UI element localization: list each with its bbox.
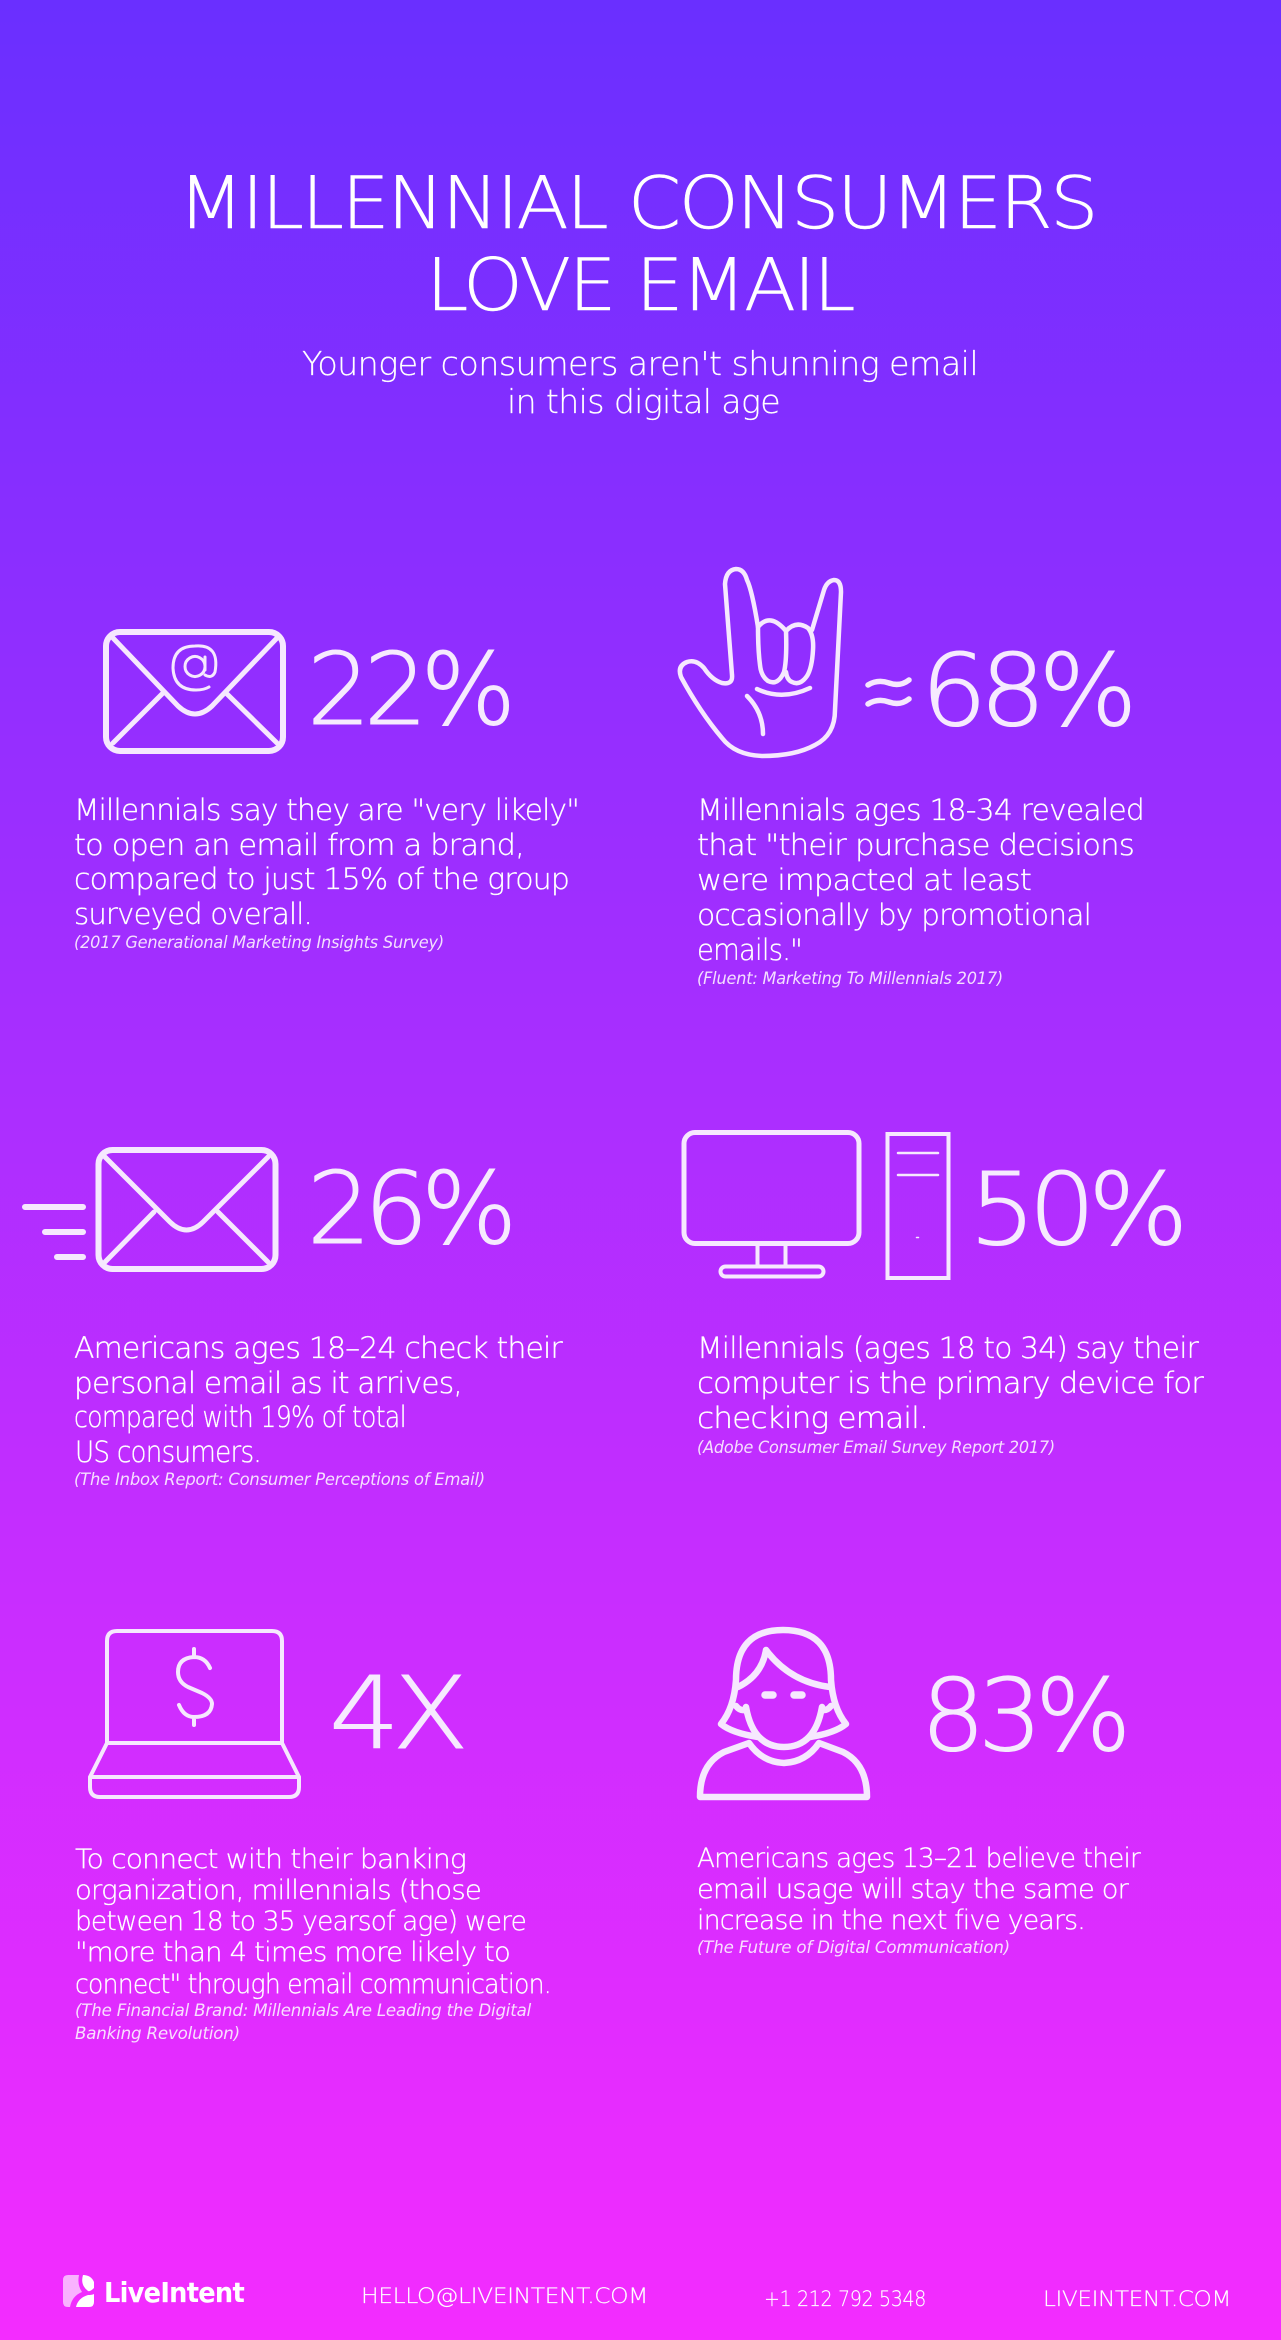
subtitle	[302, 344, 978, 421]
body text: emails."	[697, 933, 802, 967]
panel: 22 percent open rate	[74, 631, 579, 953]
subtitle: Younger consumers aren't shunning email	[302, 344, 978, 383]
stat: 22%: 22%	[307, 631, 509, 748]
title: MILLENNIAL CONSUMERS	[178, 161, 1096, 245]
body text: email usage will stay the same or	[697, 1874, 1130, 1905]
body text	[697, 1843, 1142, 1936]
icon: woman avatar	[700, 1630, 867, 1797]
body text: To connect with their banking	[75, 1844, 466, 1875]
citation	[75, 2001, 531, 2044]
icon: desktop computer	[684, 1132, 948, 1278]
body text: between 18 to 35 yearsof age) were	[75, 1906, 526, 1937]
body text: Millennials say they are "very likely"	[74, 793, 579, 827]
body text	[697, 793, 1144, 967]
citation: (Fluent: Marketing To Millennials 2017)	[697, 969, 1003, 989]
body text: surveyed overall.	[74, 897, 312, 931]
body text	[697, 1331, 1204, 1435]
title: LOVE EMAIL	[426, 243, 853, 327]
citation: (Adobe Consumer Email Survey Report 2017)	[697, 1438, 1055, 1458]
panel: 50 percent computer	[684, 1132, 1204, 1458]
panel: 26 percent check email	[25, 1150, 563, 1490]
body text	[74, 793, 579, 931]
contact: email: HELLO@LIVEINTENT.COM	[361, 2284, 648, 2308]
body text: that "their purchase decisions	[697, 828, 1134, 862]
citation: (2017 Generational Marketing Insights Survey)	[74, 933, 444, 953]
stat: 26%: 26%	[307, 1150, 510, 1267]
body text	[75, 1844, 551, 2000]
body text: US consumers.	[75, 1435, 261, 1469]
panel: 68 percent purchase decisions	[680, 569, 1144, 989]
contact: phone: +1 212 792 5348	[764, 2287, 926, 2311]
body text: were impacted at least	[697, 863, 1031, 897]
body text: occasionally by promotional	[697, 898, 1091, 932]
body text: connect" through email communication.	[75, 1969, 551, 2000]
icon: laptop with dollar sign	[90, 1631, 299, 1797]
body text: Americans ages 13–21 believe their	[697, 1843, 1142, 1874]
body text: Millennials ages 18-34 revealed	[697, 793, 1144, 827]
icon: hand sign	[680, 569, 841, 756]
citation: Banking Revolution)	[75, 2024, 240, 2044]
body text: checking email.	[697, 1401, 928, 1435]
body text: increase in the next five years.	[697, 1905, 1085, 1936]
icon: fast envelope	[25, 1150, 276, 1269]
logo: LiveIntent: LiveIntent	[104, 2276, 244, 2309]
stat: 50%: 50%	[969, 1151, 1181, 1268]
body text: compared to just 15% of the group	[74, 862, 569, 896]
subtitle: in this digital age	[507, 382, 780, 421]
body text: Americans ages 18–24 check their	[74, 1331, 563, 1365]
citation: (The Inbox Report: Consumer Perceptions of Email)	[74, 1470, 485, 1490]
stat: 68%: 68%	[921, 632, 1130, 749]
footer	[63, 2275, 1231, 2311]
title	[178, 161, 1096, 327]
stat: 4X: 4X	[329, 1655, 463, 1772]
icon: envelope with at sign	[106, 632, 283, 751]
stat: 83%: 83%	[921, 1657, 1124, 1774]
body text: personal email as it arrives,	[74, 1366, 462, 1400]
contact: website: LIVEINTENT.COM	[1043, 2287, 1231, 2311]
panel: 4X banking	[75, 1631, 551, 2044]
citation: (The Future of Digital Communication)	[697, 1938, 1010, 1958]
body text: computer is the primary device for	[697, 1366, 1204, 1400]
body text: organization, millennials (those	[75, 1875, 481, 1906]
body text: compared with 19% of total	[74, 1400, 406, 1434]
body text: to open an email from a brand,	[74, 828, 524, 862]
citation: (The Financial Brand: Millennials Are Leading the Digital	[75, 2001, 531, 2021]
body text: "more than 4 times more likely to	[75, 1937, 510, 1968]
panel: 83 percent email usage	[697, 1630, 1142, 1958]
body text: Millennials (ages 18 to 34) say their	[697, 1331, 1199, 1365]
body text	[74, 1331, 563, 1469]
approx sign	[868, 680, 909, 704]
